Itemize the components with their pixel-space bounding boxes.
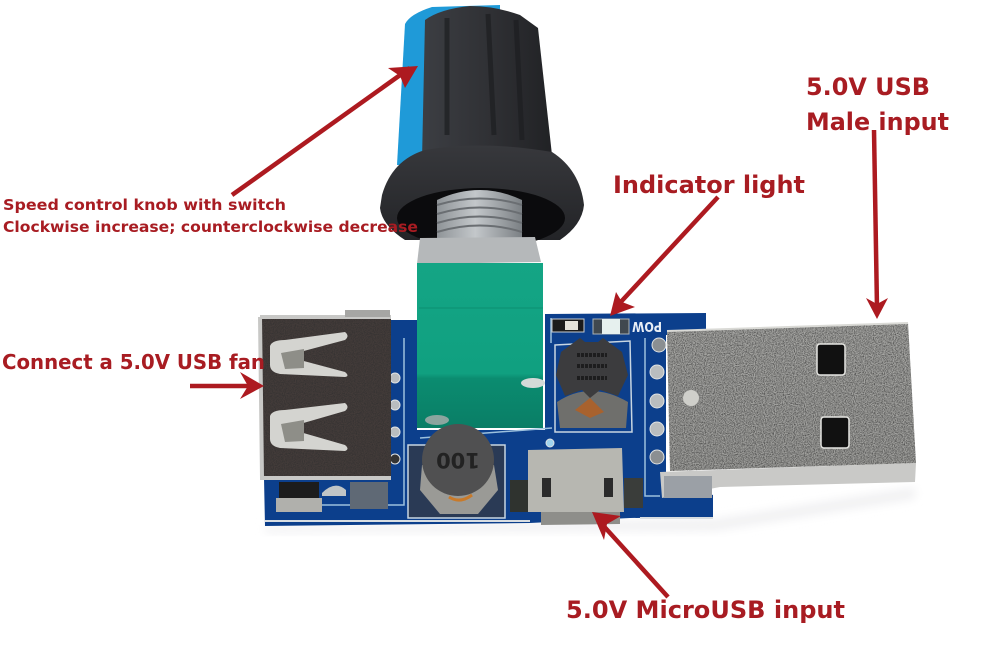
inductor 100 xyxy=(408,424,505,518)
knob opening xyxy=(397,188,565,248)
male USB plug xyxy=(660,323,916,498)
arrow: knob callout xyxy=(232,66,418,195)
label: 5.0V USB male input: 5.0V USB xyxy=(806,73,930,101)
plug hole bottom xyxy=(821,417,849,448)
upper contact slot xyxy=(270,332,348,377)
small components below USB port xyxy=(276,482,388,512)
label: speed control knob: Speed control knob with switch xyxy=(3,196,286,214)
label: 5.0V USB male input: Male input xyxy=(806,108,949,136)
indicator LED pointer target inductor xyxy=(555,338,632,432)
arrow: indicator light xyxy=(610,197,718,316)
label: speed control knob xyxy=(3,196,418,236)
circuit board xyxy=(264,313,713,526)
plug lower strip xyxy=(660,463,916,498)
arrow: micro USB input xyxy=(592,512,668,597)
label: 5.0V USB male input xyxy=(806,73,949,136)
knob flange xyxy=(380,145,584,240)
micro USB port xyxy=(510,448,643,525)
knob blue stripe xyxy=(397,5,500,170)
female USB port xyxy=(260,310,391,479)
label: speed control knob: Clockwise increase; counterclockwise decrease xyxy=(3,218,418,236)
soft shadow under board xyxy=(265,488,915,532)
potentiometer green body xyxy=(417,263,543,428)
solder pads xyxy=(390,338,666,464)
label: connect fan: Connect a 5.0V USB fan xyxy=(2,350,265,374)
label: micro USB input: 5.0V MicroUSB input xyxy=(566,596,845,624)
label: indicator light: Indicator light xyxy=(613,171,805,199)
power label and resistor xyxy=(552,318,662,334)
arrow: fan output xyxy=(190,372,264,399)
lower contact slot xyxy=(270,403,348,451)
potentiometer xyxy=(417,237,545,428)
knob xyxy=(380,5,584,248)
inductor marking: 100 xyxy=(436,448,480,472)
threaded shaft xyxy=(437,190,522,240)
plug shell xyxy=(667,323,916,471)
plug hole top xyxy=(817,344,845,375)
potentiometer metal cap xyxy=(417,237,541,264)
power label and resistor: POW xyxy=(632,318,662,333)
knob body xyxy=(422,6,552,175)
arrow: male input xyxy=(866,130,888,319)
